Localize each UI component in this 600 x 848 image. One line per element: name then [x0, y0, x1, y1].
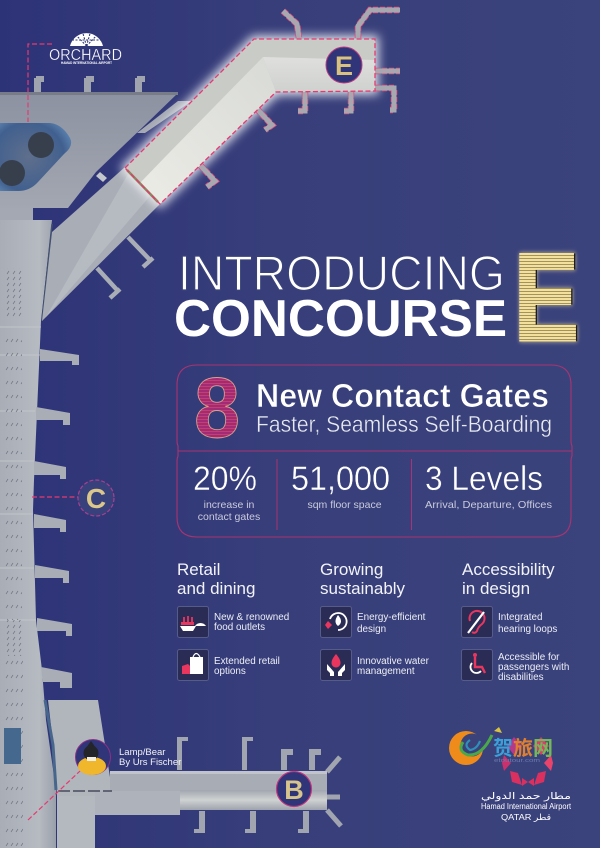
logo: Hamad International Airport: Hamad International Airport	[481, 802, 572, 811]
column: accessibility in design: disabilities	[498, 672, 544, 683]
title: Concourse: CONCOURSE	[174, 290, 507, 348]
icon: hearing loop	[462, 606, 492, 638]
Lamp/Bear caption: Lamp/Bear	[119, 747, 165, 758]
airport plan: main terminal roof	[0, 76, 192, 208]
panel: key facts	[177, 361, 572, 537]
column: growing sustainably: management	[357, 666, 415, 677]
column: retail and dining: options	[214, 666, 246, 677]
E badge	[326, 47, 362, 83]
column: growing sustainably: sustainably	[320, 579, 406, 598]
airport plan: connector wedge below Concourse E	[42, 167, 160, 321]
number 8: 8	[194, 361, 240, 456]
airport plan: Concourse E with gates	[125, 10, 400, 204]
pool with skylights	[0, 123, 71, 191]
column: growing sustainably: Growing	[320, 560, 383, 579]
dashed leader: Lamp/Bear	[28, 771, 80, 820]
icon: wheelchair	[462, 650, 492, 680]
column: growing sustainably: design	[357, 624, 386, 635]
Concourse C marker	[32, 480, 114, 516]
headline: New Contact Gates	[256, 377, 549, 414]
subheadline: Faster, Seamless Self-Boarding	[256, 411, 552, 437]
column: growing sustainably	[320, 560, 430, 680]
logo: Hamad International Airport: مطار حمد الدولي	[481, 791, 571, 802]
column: growing sustainably: Energy-efficient	[357, 612, 426, 623]
B badge: B	[284, 775, 304, 805]
column: accessibility in design: passengers with	[498, 662, 569, 673]
title: Introducing: INTRODUCING	[178, 247, 505, 301]
airport plan: main concourse column and Concourse C piers	[0, 208, 153, 848]
column: retail and dining: Extended retail	[214, 656, 280, 667]
Orchard logo: HAMAD INTERNATIONAL AIRPORT	[61, 61, 113, 65]
B badge	[276, 772, 312, 806]
column: accessibility in design: in design	[462, 579, 530, 598]
column: accessibility in design: Accessible for	[498, 652, 560, 663]
watermark logo: etoutour.com	[494, 758, 541, 764]
Concourse C marker: C	[86, 483, 106, 514]
Lamp/Bear artwork marker	[76, 740, 110, 775]
stat: 20%: contact gates	[198, 511, 260, 523]
icon: shopping bags	[178, 650, 208, 680]
icon: energy	[320, 606, 352, 638]
Lamp/Bear caption: By Urs Fischer	[119, 757, 181, 768]
column: retail and dining: Retail	[177, 560, 220, 579]
column: accessibility in design: Accessibility	[462, 560, 555, 579]
dashed leader: Orchard	[28, 44, 52, 122]
stat: 3 Levels: 3 Levels	[425, 460, 543, 498]
E badge: E	[335, 51, 353, 81]
column: retail and dining: food outlets	[214, 622, 265, 633]
Orchard logo: ORCHARD	[49, 47, 122, 64]
logo: Hamad International Airport: QATAR قطر	[501, 812, 551, 822]
stat: 51,000: 51,000	[291, 460, 390, 498]
airport plan: Concourse B and lower terminal	[45, 700, 341, 848]
stat: 20%	[193, 460, 260, 523]
icon: water	[320, 650, 352, 680]
column: accessibility in design: Integrated	[498, 612, 542, 623]
stat: 3 Levels: Arrival, Departure, Offices	[425, 499, 552, 511]
column: retail and dining	[177, 560, 289, 680]
watermark logo	[449, 727, 553, 765]
logo: Hamad International Airport	[481, 737, 572, 822]
watermark logo: 贺旅网	[493, 737, 553, 760]
column: growing sustainably: Innovative water	[357, 656, 430, 667]
column: accessibility in design: hearing loops	[498, 624, 557, 635]
stat: 20%: 20%	[193, 460, 257, 498]
stat: 51,000: sqm floor space	[307, 499, 382, 511]
stat: 20%: increase in	[204, 499, 255, 511]
diamond ring emblem	[502, 737, 553, 786]
icon: food	[178, 606, 208, 638]
Orchard logo	[49, 30, 122, 65]
column: accessibility in design	[462, 560, 569, 683]
title: big striped E: E	[514, 227, 579, 367]
column: retail and dining: New & renowned	[214, 612, 289, 623]
column: retail and dining: and dining	[177, 579, 255, 598]
